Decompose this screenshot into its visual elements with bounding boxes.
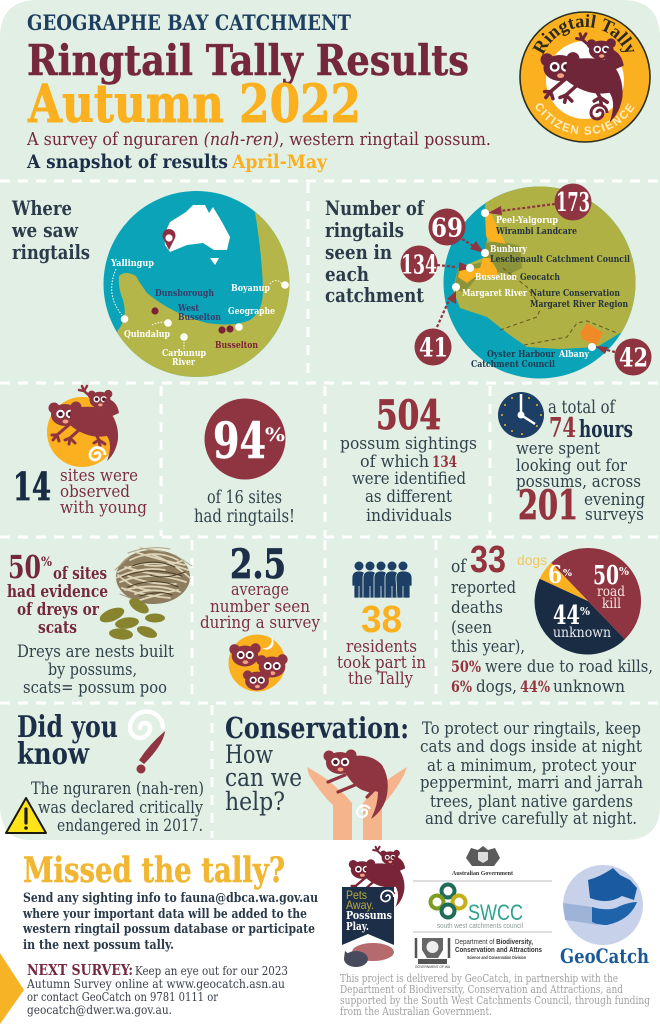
catchment labels <box>462 216 631 370</box>
stat: reported deaths: this year), <box>451 637 525 657</box>
badge: 134: 134 <box>401 250 437 280</box>
logo: Department of Biodiversity: Department of Biodiversity, <box>455 939 533 946</box>
heading: we saw <box>11 218 79 242</box>
stat: dreys and scats: % <box>41 555 53 570</box>
catchment labels: Oyster Harbour <box>487 350 555 360</box>
stat: reported deaths: 50% <box>451 657 481 676</box>
stat: dreys and scats: had evidence <box>7 582 108 601</box>
stat: hours and surveys: a total of <box>548 398 616 418</box>
site labels: West <box>177 304 200 314</box>
catchment labels: Geocatch <box>520 273 560 283</box>
site labels <box>110 259 275 368</box>
panel: conservation: Conservation: <box>225 711 409 745</box>
stat: dreys and scats: scats <box>38 618 77 637</box>
catchment labels: Margaret River Region <box>530 300 628 310</box>
pie chart: % <box>619 565 630 578</box>
heading: seen in <box>325 240 392 264</box>
logo: SWCC: south west catchments council <box>437 921 523 930</box>
site labels: Yallingup <box>110 259 154 269</box>
panel: number of ringtails per catchment <box>325 170 660 378</box>
logo: Ringtail Tally Citizen Science: Ringtail Tally <box>532 14 634 55</box>
next survey: NEXT SURVEY: <box>27 961 133 979</box>
stat: residents: residents <box>346 637 417 656</box>
stat: reported deaths: reported <box>451 578 516 598</box>
stat: average seen: during a survey <box>200 613 321 632</box>
header <box>26 10 491 173</box>
site labels: River <box>172 358 195 368</box>
stat: dreys and scats: Dreys are nests built <box>17 642 174 662</box>
panel: did you know: know <box>17 737 90 772</box>
stat: 94 percent: of 16 sites <box>207 488 282 508</box>
site labels: Boyanup <box>231 284 270 294</box>
panel: missed the tally: Send any sighting info to fauna@dbca.wa.gov.au <box>23 891 318 906</box>
stat: 504 sightings: 504 <box>376 392 441 439</box>
icon: three possum heads <box>228 634 288 692</box>
heading: ringtails <box>325 218 404 242</box>
panel: did you know: was declared critically <box>38 798 203 818</box>
stat: reported deaths: 33 <box>470 539 506 581</box>
catchment labels: Peel-Yalgorup <box>496 216 558 226</box>
next survey: geocatch@dwer.wa.gov.au. <box>27 1002 172 1017</box>
pie chart: 6 <box>548 560 562 589</box>
title: Ringtail Tally Results <box>27 36 469 85</box>
panel: missed the tally: Missed the tally? <box>23 850 285 891</box>
white points <box>452 209 596 351</box>
pin <box>163 229 176 250</box>
stat: hours and surveys: possums, across <box>516 472 641 492</box>
logo: Department of Biodiversity: GOVERNMENT OF WA <box>415 965 451 969</box>
badge: 42 <box>614 338 652 376</box>
title: season: Autumn 2022 <box>27 74 361 135</box>
stat: average seen <box>200 541 321 692</box>
stat: 504 sightings: of which <box>360 452 429 472</box>
stat: 504 sightings: as different <box>365 487 452 507</box>
panel: missed the tally: western ringtail possum database or participate <box>22 922 315 937</box>
badge: 42: 42 <box>619 344 648 374</box>
icon: sleeping pets <box>352 943 394 961</box>
stat: reported deaths: 6% <box>451 677 472 696</box>
stat: 504 sightings: were identified <box>352 469 466 489</box>
panel: missed the tally: where your important data will be added to the <box>22 907 307 922</box>
snapshot line: April-May <box>231 151 328 173</box>
acknowledgement text: from the Australian Government. <box>340 1005 492 1018</box>
stat: sites with young <box>13 386 147 517</box>
logo: Australian Government <box>452 846 514 877</box>
stat: hours and surveys: looking out for <box>516 456 628 476</box>
icon: scats <box>98 596 165 641</box>
pie chart: 44 <box>553 601 580 631</box>
stat: 504 sightings: individuals <box>366 506 452 526</box>
logo: Department of Biodiversity: Conservation and Attractions <box>455 947 542 954</box>
heading <box>11 196 90 264</box>
heading: catchment <box>325 283 425 307</box>
stat: hours and surveys: were spent <box>516 439 600 459</box>
site labels: Busselton <box>178 313 221 323</box>
stat: 94 percent: 94 <box>213 411 266 470</box>
acknowledgement text <box>340 972 650 1018</box>
stat: reported deaths: deaths <box>451 598 503 618</box>
stat: residents: 38 <box>361 599 402 641</box>
stat: 94 percent: % <box>265 424 285 446</box>
icon: question mark tail <box>130 712 164 774</box>
badge: 69: 69 <box>431 214 463 244</box>
pie chart: road <box>597 584 625 600</box>
heading: ringtails <box>12 240 90 264</box>
stat: dreys and scats: 50 <box>8 548 41 586</box>
heading <box>325 196 425 307</box>
section dividers <box>0 181 660 838</box>
panel: did you know: Did you <box>17 710 118 745</box>
stat: 504 sightings: 134 <box>432 452 457 471</box>
panel: where we saw ringtails <box>12 191 290 377</box>
logo: Ringtail Tally Citizen Science <box>519 11 651 143</box>
site labels: Busselton <box>215 341 258 351</box>
pie chart <box>535 548 641 655</box>
stat: 94 percent <box>194 398 295 527</box>
stat: dreys and scats: of dreys or <box>17 600 99 619</box>
panel: conservation: trees, plant native gardens <box>430 792 633 812</box>
catchment labels: Leschenault Catchment Council <box>490 255 631 265</box>
next survey: Autumn Survey online at www.geocatch.asn.au <box>26 976 285 991</box>
stat: hours and surveys: 201 <box>518 482 578 529</box>
stat: dreys and scats: scats= possum poo <box>23 678 167 698</box>
map: Geographe Bay <box>104 191 290 377</box>
stat: residents <box>337 562 426 688</box>
stat: hours and surveys <box>498 392 645 529</box>
icon: possum with young <box>47 386 119 467</box>
logo: Pets Away Possums Play: Possums <box>346 909 392 922</box>
site labels: Carbunup <box>162 349 206 359</box>
arrows <box>437 204 615 354</box>
panel: missed the tally <box>0 850 318 1024</box>
map: south west catchments <box>400 170 660 378</box>
stat: reported deaths: unknown <box>553 677 625 697</box>
panel: conservation: help? <box>225 787 285 816</box>
badge: 41 <box>414 328 452 366</box>
badge: 134 <box>400 246 438 282</box>
catchment labels: Nature Conservation <box>530 289 620 299</box>
site labels: Dunsborough <box>155 289 214 299</box>
arrow marker <box>0 953 24 1024</box>
icon: drey nest <box>115 548 192 604</box>
catchment labels: Bunbury <box>490 245 528 255</box>
stat: sites with young: observed <box>60 482 130 501</box>
stat: dreys and scats <box>7 548 192 698</box>
badge: 173: 173 <box>556 188 590 218</box>
heading: Number of <box>325 196 425 220</box>
icon: clock <box>498 392 544 438</box>
stat: hours and surveys: 74 <box>549 413 576 444</box>
stat: sites with young: sites were <box>60 466 138 485</box>
pie chart: 50 <box>593 561 619 591</box>
subtitle: catchment: GEOGRAPHE BAY CATCHMENT <box>27 10 351 35</box>
Australia <box>164 205 230 252</box>
site labels: Geographe <box>228 307 275 317</box>
panel: conservation: and drive carefully at night. <box>425 809 637 829</box>
snapshot line: A snapshot of results <box>26 151 228 173</box>
intro line: A survey of nguraren (nah-ren), western ringtail possum. <box>26 129 491 150</box>
site labels: Quindalup <box>124 330 170 340</box>
icon: hands holding possum <box>307 750 407 840</box>
catchment labels: Catchment Council <box>471 360 555 370</box>
panel: conservation: at a minimum, protect your <box>427 756 637 776</box>
stat: average seen: number seen <box>210 597 310 616</box>
logo: Department of Biodiversity <box>415 938 542 969</box>
stat: 94 percent: had ringtails! <box>194 507 295 527</box>
panel: did you know: endangered in 2017. <box>57 816 203 836</box>
logo: SWCC <box>430 884 523 930</box>
panel: conservation: How <box>225 740 273 769</box>
icon: warning triangle <box>6 798 46 833</box>
logo: Pets Away Possums Play: Play. <box>346 920 369 933</box>
catchment labels: Albany <box>558 350 590 360</box>
pie chart: % <box>580 605 591 618</box>
panel: did you know <box>6 710 204 836</box>
logo: Australian Government: Australian Government <box>452 870 514 877</box>
logo: Pets Away Possums Play <box>342 847 405 967</box>
stat: average seen: 2.5 <box>230 541 286 588</box>
logo: Pets Away Possums Play: Away. <box>346 898 374 912</box>
site dots <box>121 281 289 341</box>
pie chart: % <box>563 569 572 579</box>
stat: sites with young: 14 <box>13 464 51 509</box>
stat: dreys and scats: of sites <box>53 564 107 583</box>
heading: each <box>325 262 369 286</box>
catchment labels: Margaret River <box>462 289 527 299</box>
logo: Pets Away Possums Play: Pets <box>346 888 367 902</box>
stat: hours and surveys: surveys <box>585 505 644 525</box>
next survey <box>26 961 288 1017</box>
stat: hours and surveys: hours <box>579 416 633 443</box>
panel: conservation <box>225 711 643 840</box>
stat: 504 sightings <box>340 392 477 526</box>
logo: Department of Biodiversity: Science and Conservation Division <box>467 955 526 960</box>
logo: SWCC: SWCC <box>468 900 523 925</box>
stat: sites with young: with young <box>60 498 147 517</box>
stat: reported deaths: dogs <box>517 552 547 568</box>
logo: Ringtail Tally Citizen Science: CITIZEN SCIENCE <box>536 103 635 135</box>
stat: reported deaths <box>451 539 653 697</box>
panel: conservation: can we <box>225 763 302 792</box>
stat: residents: took part in <box>337 653 426 672</box>
logo: GeoCatch <box>560 865 649 968</box>
stat: average seen: average <box>231 580 289 599</box>
pie chart: kill <box>602 596 621 612</box>
panel: missed the tally: in the next possum tally. <box>23 938 174 953</box>
stat: residents: the Tally <box>348 669 414 688</box>
next survey: Keep an eye out for our 2023 <box>135 963 288 978</box>
stat: reported deaths: dogs, <box>476 677 517 697</box>
stat: reported deaths: 44% <box>520 677 550 696</box>
panel: did you know: The nguraren (nah-ren) <box>31 779 204 799</box>
stat: hours and surveys: evening <box>584 490 645 510</box>
pie chart: unknown <box>553 625 611 641</box>
catchment labels: Wirambi Landcare <box>495 227 577 237</box>
badge: 41: 41 <box>419 334 448 364</box>
heading: Where <box>11 196 72 220</box>
badge: 173 <box>554 184 592 220</box>
catchment labels: Busselton <box>475 273 517 283</box>
stat: reported deaths: (seen <box>451 618 492 638</box>
stat: reported deaths: of <box>451 556 467 577</box>
icon: people <box>352 562 412 598</box>
stat: 504 sightings: possum sightings <box>340 434 477 454</box>
stat: dreys and scats: by possums, <box>48 660 137 680</box>
next survey: or contact GeoCatch on 9781 0111 or <box>27 989 218 1004</box>
